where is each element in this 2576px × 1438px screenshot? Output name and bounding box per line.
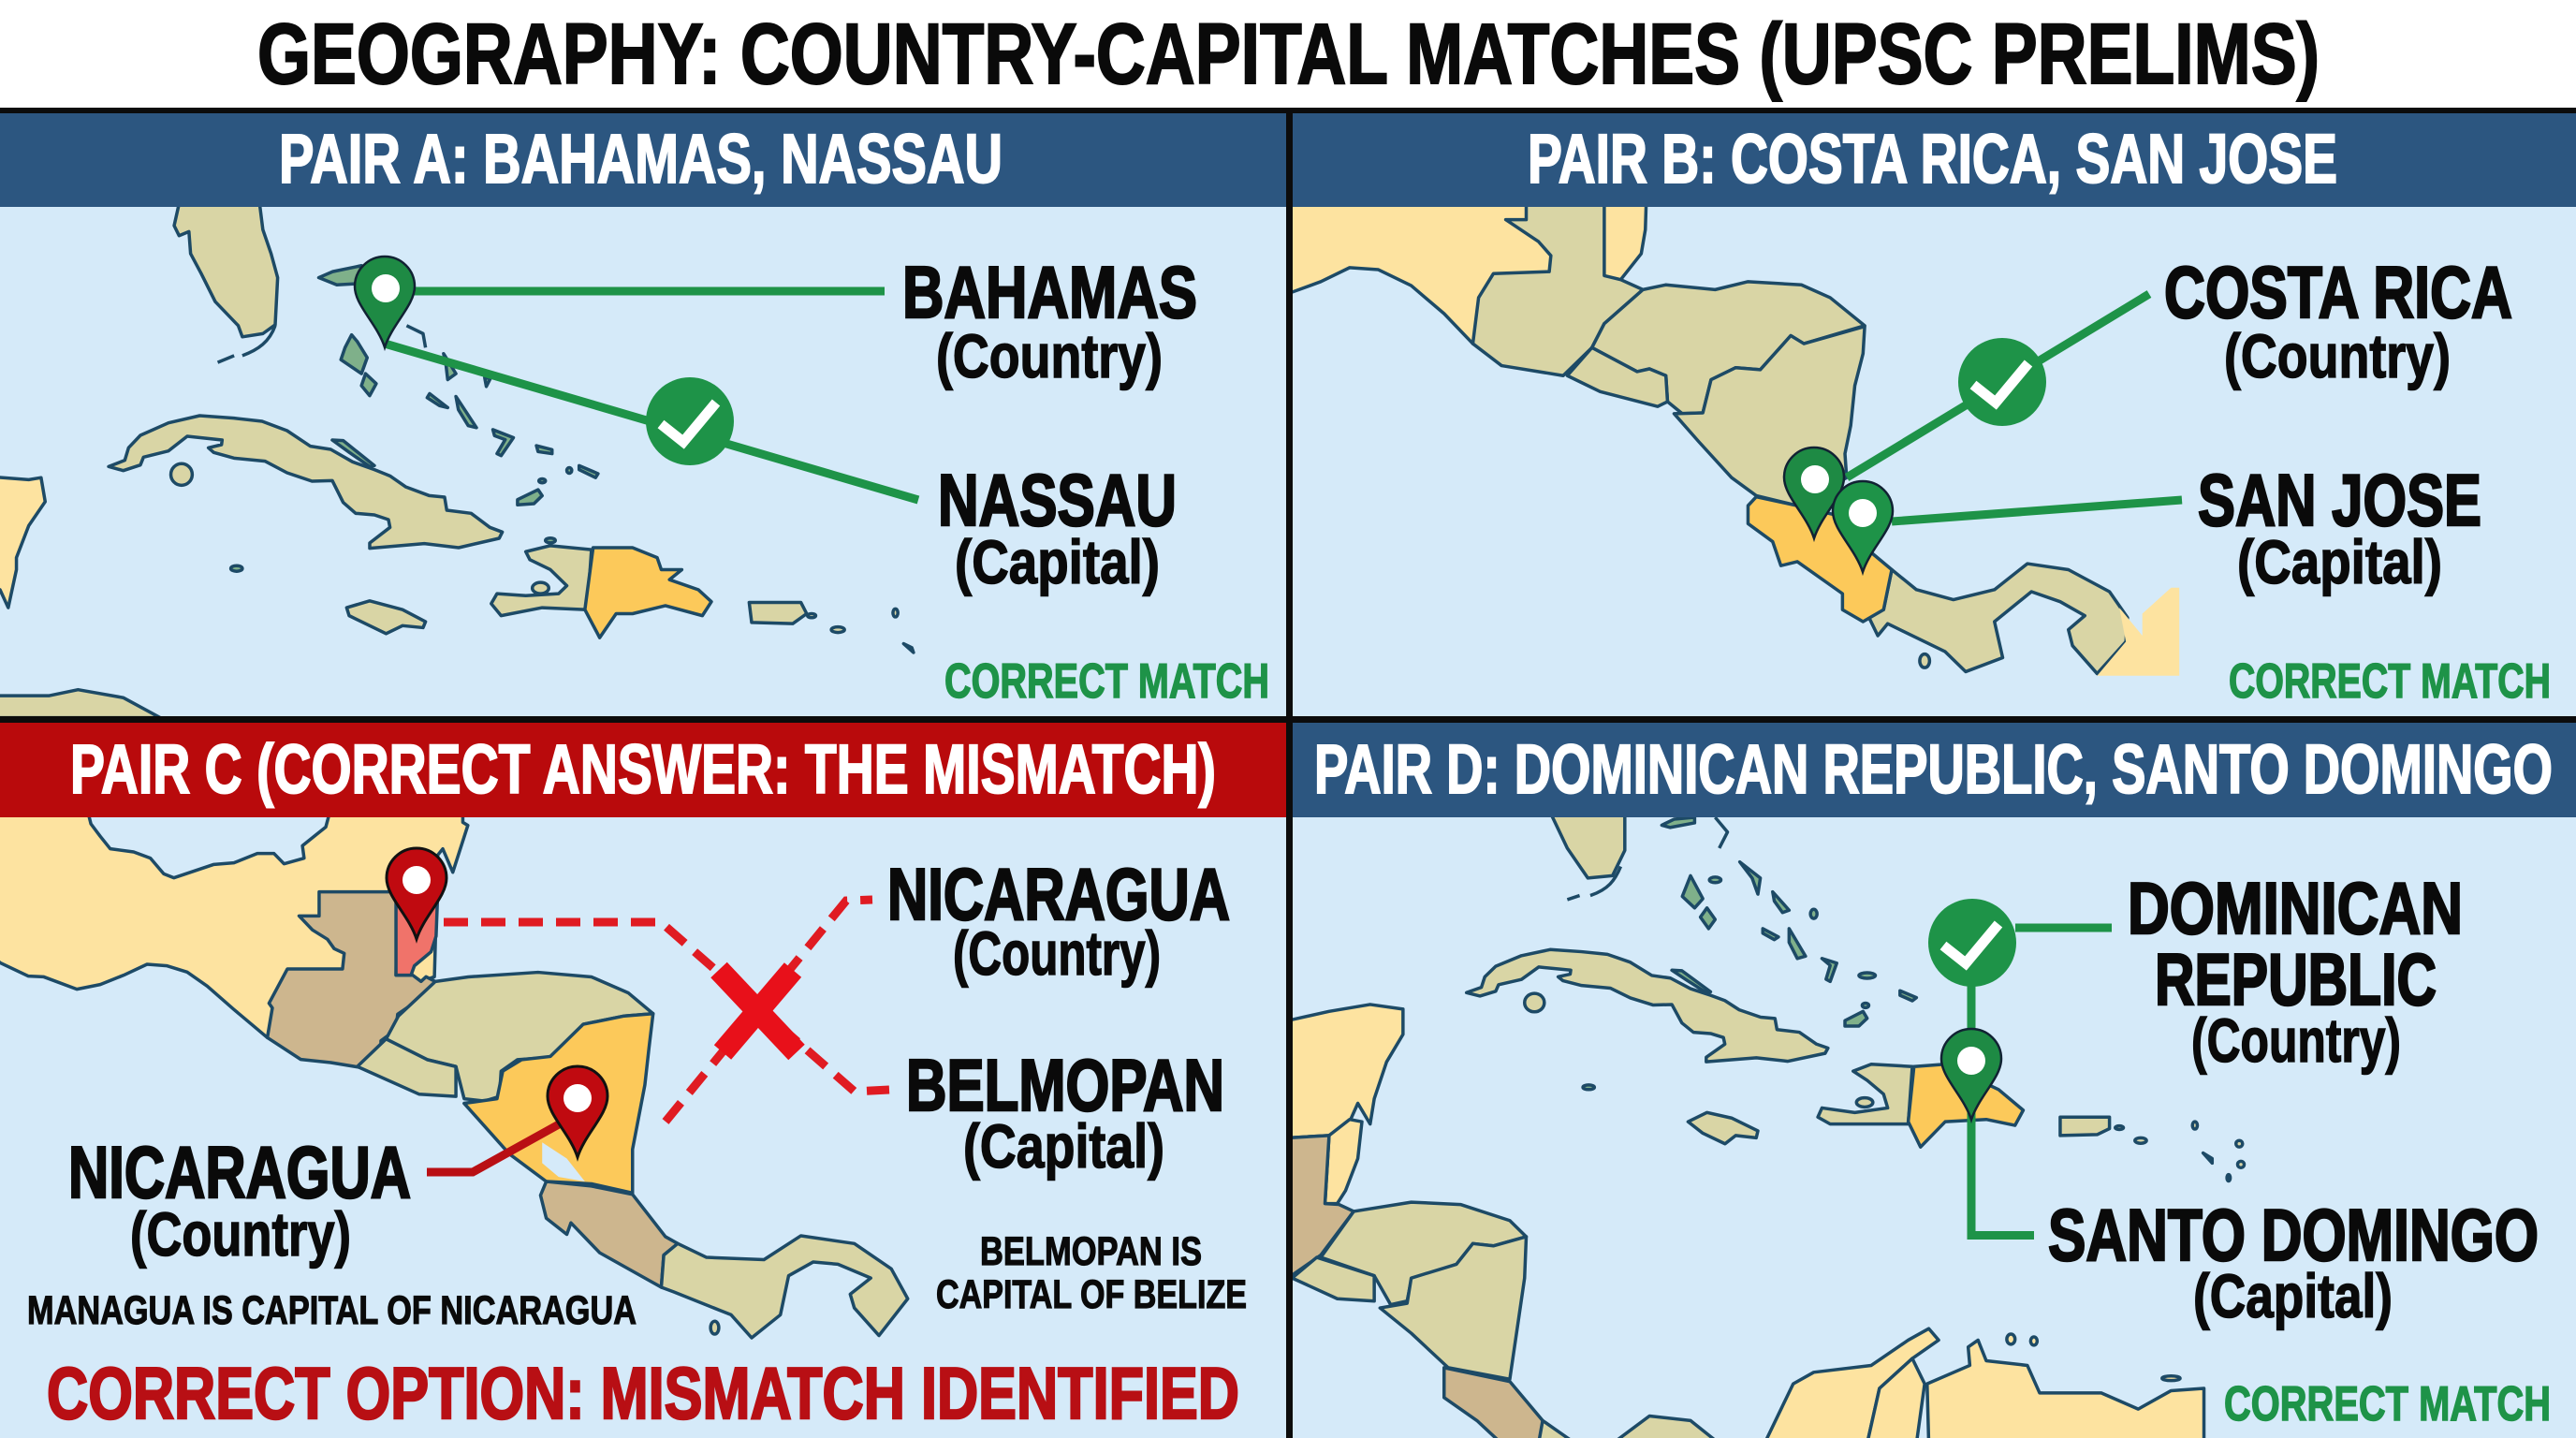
label: Nicaragua on map: NICARAGUA [68, 1131, 411, 1213]
pin: Nicaragua [548, 1066, 607, 1157]
pin: Belize [387, 848, 446, 939]
label: capital tag: (Capital) [2193, 1261, 2393, 1330]
label: Bahamas: BAHAMAS [902, 251, 1197, 333]
label: Nassau: NASSAU [938, 459, 1177, 541]
connector: Costa Rica [1847, 294, 2149, 477]
map: Caribbean with Bahamas [0, 204, 914, 718]
connector: Dominican Republic [2015, 923, 2112, 932]
note: Managua: MANAGUA IS CAPITAL OF NICARAGUA [27, 1288, 637, 1333]
header: pair A: PAIR A: BAHAMAS, NASSAU [279, 120, 1003, 198]
label: country tag on map: (Country) [130, 1199, 351, 1269]
panel: pair A [0, 113, 1286, 718]
pin: Nassau [355, 257, 415, 347]
note: Belmopan: BELMOPAN IS [980, 1229, 1202, 1274]
note: Belmopan: CAPITAL OF BELIZE [936, 1272, 1247, 1317]
pin: Costa Rica [1784, 448, 1844, 538]
connector: San Jose [1892, 500, 2182, 521]
header: pair A [0, 113, 1286, 207]
label: Nicaragua: NICARAGUA [887, 853, 1230, 935]
connector: Nassau [385, 344, 918, 500]
label: country tag: (Country) [936, 321, 1163, 390]
island: Cuba [1467, 949, 1828, 1062]
label: San Jose: SAN JOSE [2198, 459, 2481, 541]
connector: Bahamas [412, 286, 885, 296]
check badge [1928, 899, 2016, 987]
verdict: mismatch identified: CORRECT OPTION: MISMATCH IDENTIFIED [47, 1352, 1239, 1434]
map: Central America with Costa Rica highlighted [1288, 204, 2179, 676]
label: Dominican Republic: REPUBLIC [2155, 938, 2437, 1020]
label: country tag: (Country) [953, 918, 1161, 988]
map: Caribbean with Dominican Republic highlighted [1288, 814, 2245, 1438]
note: Belmopan [936, 1229, 1247, 1317]
dashed connector: Belize to Belmopan [444, 922, 889, 1092]
panel: pair C [0, 723, 1286, 1438]
panel: pair D [1288, 723, 2576, 1438]
label: Dominican Republic: DOMINICAN [2128, 867, 2463, 949]
island: Cuba [109, 416, 503, 549]
label: country tag: (Country) [2191, 1005, 2401, 1075]
label: capital tag: (Capital) [2237, 527, 2442, 596]
label: country tag: (Country) [2224, 321, 2451, 390]
check badge [646, 377, 734, 465]
check badge [1958, 338, 2046, 426]
panel: pair B [1288, 113, 2576, 716]
connector: Nicaragua label [427, 1124, 559, 1172]
verdict: correct match: CORRECT MATCH [944, 654, 1269, 709]
header: pair B [1293, 113, 2576, 207]
label: Belmopan: BELMOPAN [906, 1044, 1224, 1126]
connector: Santo Domingo [1971, 986, 2034, 1236]
dashed connector: Nicaragua [666, 900, 872, 1122]
pin: San Jose [1833, 481, 1893, 572]
pin: Santo Domingo [1941, 1029, 2001, 1120]
label: Dominican Republic [2128, 867, 2463, 1020]
icon: red cross [719, 970, 797, 1052]
label: capital tag: (Capital) [955, 527, 1160, 596]
header: pair C [0, 723, 1286, 817]
label: capital tag: (Capital) [963, 1111, 1164, 1181]
map: Central America with Nicaragua and Belize highlighted [0, 814, 908, 1338]
header: pair C: PAIR C (CORRECT ANSWER: THE MISMATCH) [70, 730, 1216, 808]
